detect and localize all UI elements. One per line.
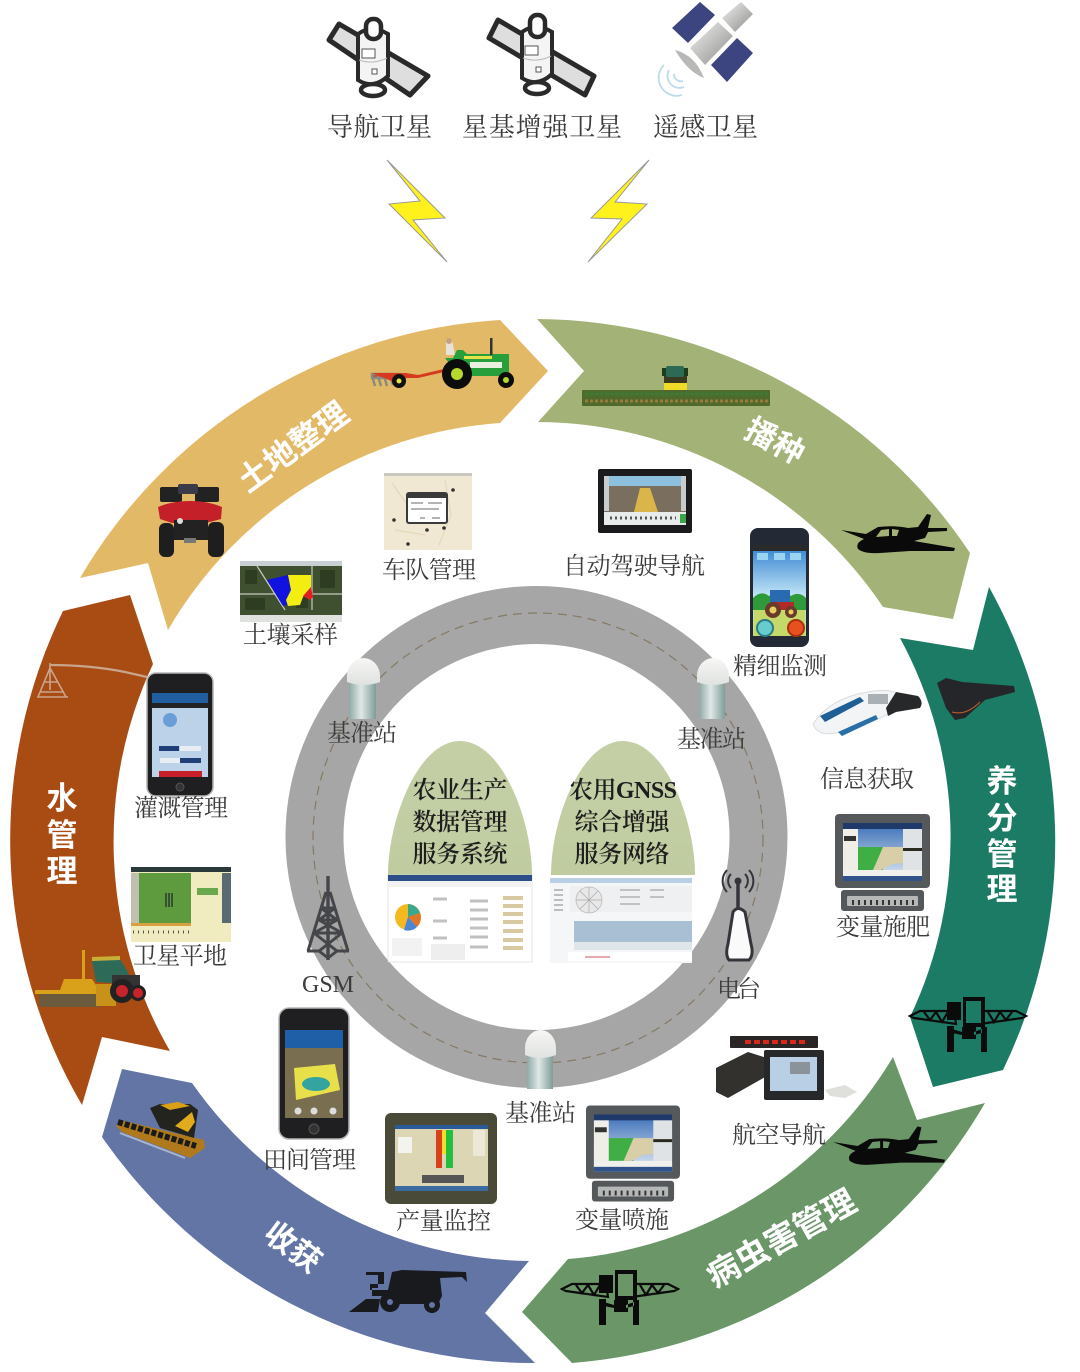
icon: plane silhouette xyxy=(841,514,955,553)
label: variable spraying: 变量喷施 xyxy=(575,1207,669,1234)
icon: fixed wing drone xyxy=(937,678,1015,720)
device: variable rate spraying monitor xyxy=(586,1106,680,1201)
text: system title: 服务系统 xyxy=(412,841,508,868)
label: right base station: 基准站 xyxy=(677,726,746,753)
icon: combine silhouette xyxy=(349,1270,467,1313)
label: auto-steering navigation: 自动驾驶导航 xyxy=(563,553,705,580)
device: variable rate fertilising monitor xyxy=(835,814,930,911)
label: information acquisition: 信息获取 xyxy=(820,766,914,793)
text: network title xyxy=(569,777,677,868)
label: irrigation management: 灌溉管理 xyxy=(134,795,228,822)
icon: sprayer silhouette xyxy=(910,997,1026,1052)
icon: radio antenna xyxy=(723,870,753,960)
heading: water management: 管 xyxy=(46,818,78,853)
icon: plane silhouette xyxy=(833,1126,945,1165)
chart: GNSS software screenshot xyxy=(550,878,692,963)
icon: centre pivot irrigation xyxy=(37,663,147,697)
icon: sprayer silhouette xyxy=(562,1270,678,1325)
icon: red quad bike xyxy=(158,484,224,557)
arrow: water management xyxy=(10,595,170,1105)
icon: GSM tower xyxy=(307,876,349,960)
heading: nutrient management: 养 xyxy=(986,764,1018,799)
icon: remote sensing satellite xyxy=(659,2,753,96)
text: system title: 数据管理 xyxy=(412,809,508,836)
icon: left base station xyxy=(347,658,380,719)
panel: agricultural GNSS augmentation service network xyxy=(550,741,695,963)
label: aviation navigation: 航空导航 xyxy=(732,1122,826,1149)
text: system title xyxy=(412,777,508,868)
heading: water management: 理 xyxy=(46,854,78,889)
heading: water management xyxy=(46,781,78,889)
arrow: pest management xyxy=(522,1057,985,1363)
icon: navigation satellite xyxy=(329,19,428,96)
text: network title: 服务网络 xyxy=(574,841,670,868)
label: bottom base station: 基准站 xyxy=(505,1100,576,1127)
label: soil sampling: 土壤采样 xyxy=(243,622,338,649)
device: irrigation phone xyxy=(147,673,213,796)
text: network title: 农用GNSS xyxy=(569,777,677,804)
label: variable fertilising: 变量施肥 xyxy=(836,914,930,941)
heading: land preparation: 土地整理 xyxy=(231,395,355,499)
label: GSM: GSM xyxy=(302,972,354,998)
label: fleet management: 车队管理 xyxy=(382,557,476,584)
text: system title: 农业生产 xyxy=(412,777,508,804)
label: satellite levelling: 卫星平地 xyxy=(133,943,227,970)
device: soil sampling map xyxy=(240,561,342,622)
icon: right lightning bolt xyxy=(588,160,649,262)
heading: pest management: 病虫害管理 xyxy=(700,1182,862,1295)
chart: dashboard screenshot xyxy=(388,875,532,962)
label: navigation satellite: 导航卫星 xyxy=(327,113,432,142)
device: field management phone xyxy=(279,1008,349,1139)
label: remote sensing satellite: 遥感卫星 xyxy=(653,113,758,142)
icon: tractor with plough xyxy=(372,338,514,389)
device: yield monitor xyxy=(385,1113,497,1204)
icon: right base station xyxy=(697,658,729,719)
heading: sowing: 播种 xyxy=(739,411,810,471)
label: field management: 田间管理 xyxy=(263,1147,356,1174)
label: precision monitoring: 精细监测 xyxy=(733,653,827,680)
heading: nutrient management: 管 xyxy=(986,837,1018,872)
arrow: sowing xyxy=(537,319,970,619)
device: aviation navigation kit xyxy=(716,1036,857,1100)
label: radio: 电台 xyxy=(717,976,761,1003)
device: precision monitoring phone xyxy=(750,528,809,647)
icon: planter xyxy=(582,366,770,406)
panel: farm production data management system xyxy=(388,741,532,962)
heading: nutrient management: 理 xyxy=(986,872,1018,907)
arrow: nutrient management xyxy=(900,587,1055,1087)
icon: augmentation satellite xyxy=(489,15,594,95)
arrow: harvest xyxy=(102,1069,535,1363)
device: satellite levelling screen xyxy=(131,867,231,942)
panel: base station ring xyxy=(313,613,763,1063)
label: left base station: 基准站 xyxy=(327,720,397,747)
device: handheld sensor xyxy=(813,690,922,736)
icon: land leveller xyxy=(35,950,146,1007)
device: fleet management map xyxy=(384,473,472,550)
icon: yellow harvester xyxy=(116,1102,205,1158)
heading: nutrient management: 分 xyxy=(986,801,1018,836)
icon: left lightning bolt xyxy=(387,160,447,262)
icon: bottom base station xyxy=(525,1030,556,1089)
label: yield monitoring: 产量监控 xyxy=(396,1208,491,1235)
heading: harvest: 收获 xyxy=(257,1215,328,1280)
device: auto-steering tablet xyxy=(598,469,692,533)
heading: water management: 水 xyxy=(46,781,78,816)
label: augmentation satellite: 星基增强卫星 xyxy=(462,113,622,142)
heading: nutrient management xyxy=(986,764,1018,907)
arrow: land preparation xyxy=(80,320,548,630)
text: network title: 综合增强 xyxy=(574,809,672,836)
